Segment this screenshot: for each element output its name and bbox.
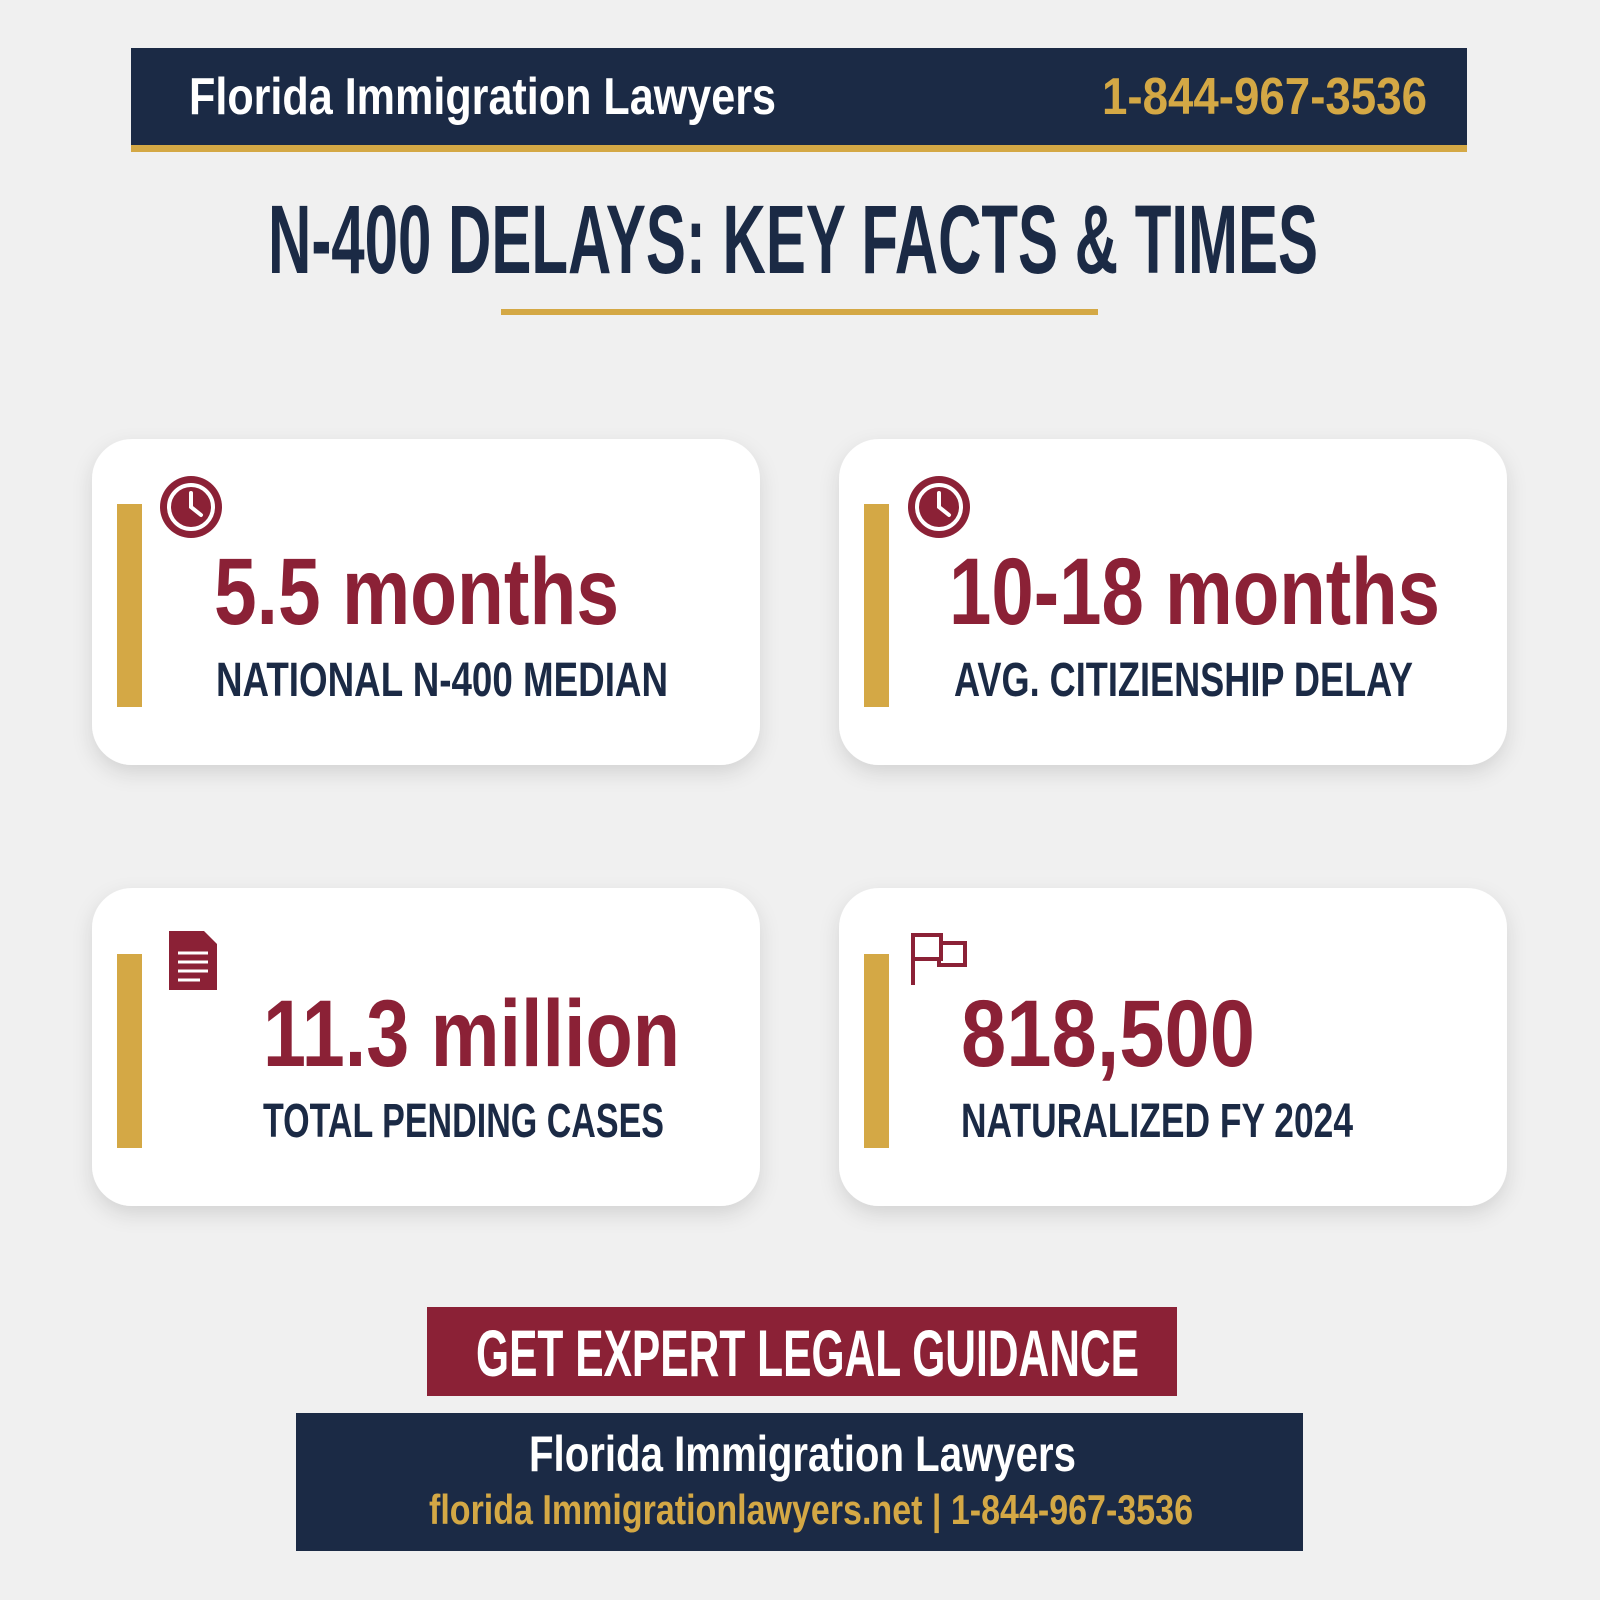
value: 10-18 months xyxy=(949,539,1440,645)
icon: flag xyxy=(913,933,965,985)
CTA banner: GET EXPERT LEGAL GUIDANCE xyxy=(476,1316,1139,1390)
value: 818,500 xyxy=(961,981,1255,1087)
panel: national median xyxy=(92,439,760,765)
header bar xyxy=(131,48,1467,152)
value: 11.3 million xyxy=(263,981,680,1087)
panel: citizenship delay xyxy=(839,439,1507,765)
footer firm name: Florida Immigration Lawyers xyxy=(529,1426,1076,1482)
icon: document xyxy=(169,931,217,990)
panel: pending cases xyxy=(92,888,760,1206)
label: NATURALIZED FY 2024 xyxy=(961,1095,1353,1148)
header phone: 1-844-967-3536 xyxy=(1102,68,1427,126)
label: NATIONAL N-400 MEDIAN xyxy=(216,654,668,707)
label: AVG. CITIZIENSHIP DELAY xyxy=(954,654,1413,707)
footer contact box xyxy=(296,1413,1303,1551)
title underline xyxy=(501,309,1098,315)
icon: clock xyxy=(908,476,970,538)
footer website and phone: florida Immigrationlawyers.net | 1-844-967-3536 xyxy=(429,1486,1193,1534)
label: TOTAL PENDING CASES xyxy=(263,1095,664,1148)
panel: naturalized xyxy=(839,888,1507,1206)
icon: clock xyxy=(160,476,222,538)
CTA banner xyxy=(427,1307,1177,1396)
value: 5.5 months xyxy=(214,539,619,645)
header firm name: Florida Immigration Lawyers xyxy=(189,68,776,126)
